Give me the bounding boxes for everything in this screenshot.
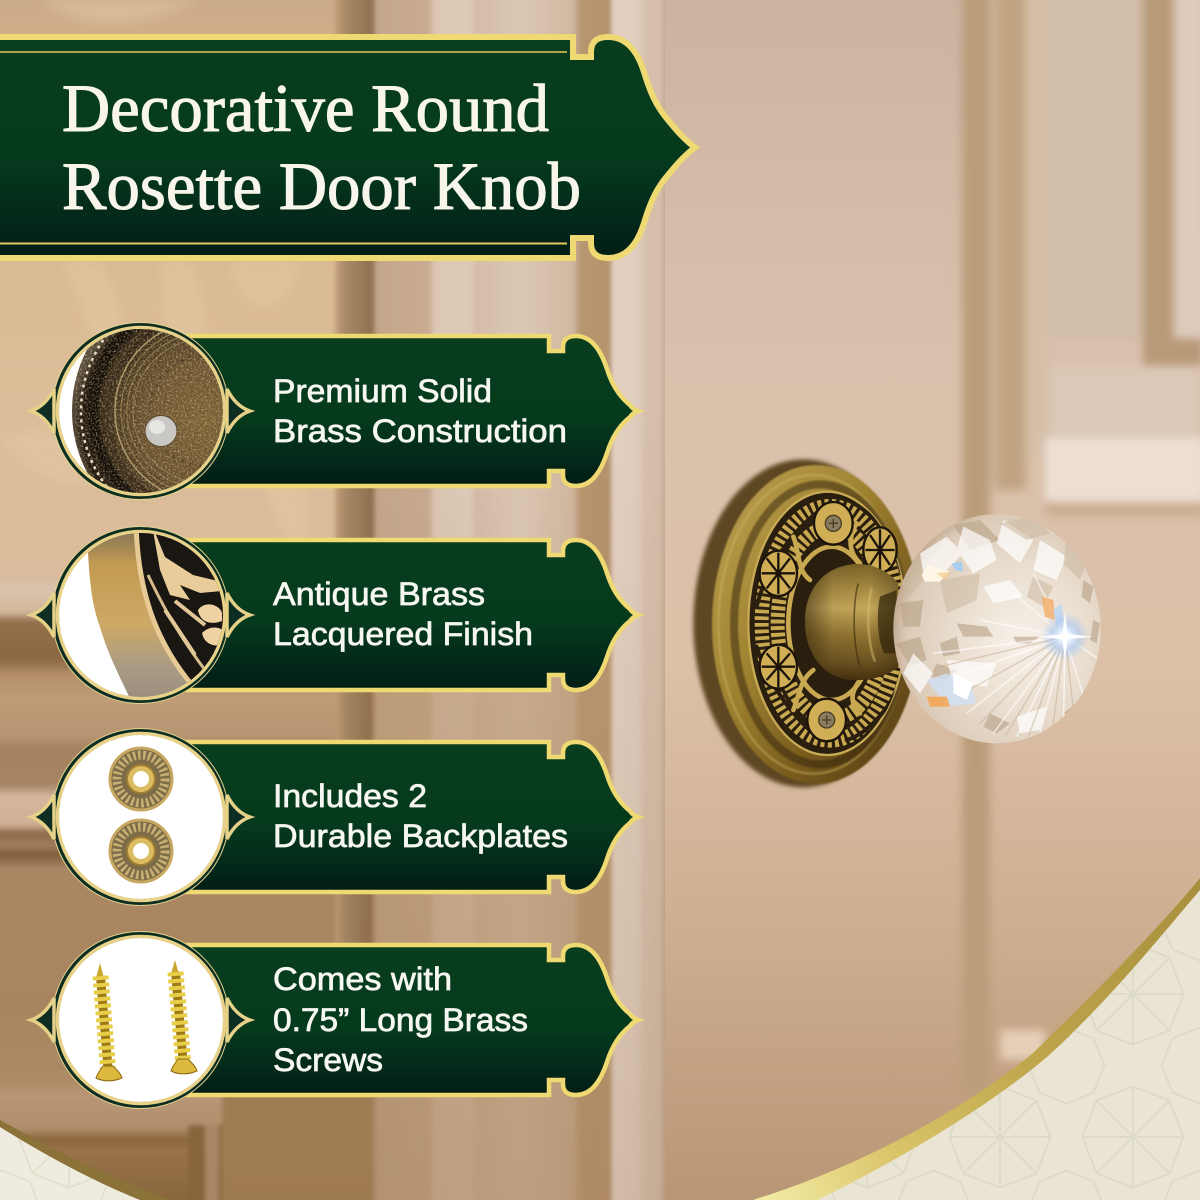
banner shape xyxy=(180,336,638,486)
feature text: Screws xyxy=(273,1042,383,1078)
feature text: Brass Construction xyxy=(273,413,567,449)
thumbnail: two brass screws xyxy=(59,938,223,1102)
feature text: Antique Brass xyxy=(273,576,485,612)
door knob with rosette plate and crystal handle xyxy=(693,459,1101,787)
feature text: Premium Solid xyxy=(273,373,492,409)
medallion frame xyxy=(31,526,250,704)
medallion frame xyxy=(31,932,250,1108)
banner shape xyxy=(180,742,638,892)
feature panel: brass screws xyxy=(31,932,638,1108)
title text: Rosette Door Knob xyxy=(62,148,581,224)
brass stem and collar xyxy=(805,564,898,680)
banner shape xyxy=(180,945,638,1095)
feature panel: two durable backplates xyxy=(31,728,638,906)
title text: Decorative Round xyxy=(62,70,549,146)
feature text: Lacquered Finish xyxy=(273,616,533,652)
rosette backplate xyxy=(693,459,920,787)
feature text: Includes 2 xyxy=(273,778,427,814)
bottom right corner: gold swoosh with cream geometric pattern xyxy=(753,878,1200,1200)
thumbnail: brushed brass close-up with pin xyxy=(59,329,223,493)
banner shape xyxy=(180,540,638,690)
crystal glass knob xyxy=(893,514,1101,743)
feature text: 0.75” Long Brass xyxy=(273,1002,528,1038)
medallion frame xyxy=(31,322,250,500)
feature panel: antique brass finish xyxy=(31,525,638,705)
title banner xyxy=(0,37,695,258)
thumbnail: lacquered finish close-up xyxy=(59,533,223,697)
thumbnail: two backplates xyxy=(59,735,223,899)
medallion frame xyxy=(31,728,250,906)
feature text: Durable Backplates xyxy=(273,818,568,854)
bottom left corner: olive band with cream geometric pattern xyxy=(0,1120,173,1200)
feature text: Comes with xyxy=(273,961,452,997)
feature panel: solid brass construction xyxy=(26,322,645,500)
